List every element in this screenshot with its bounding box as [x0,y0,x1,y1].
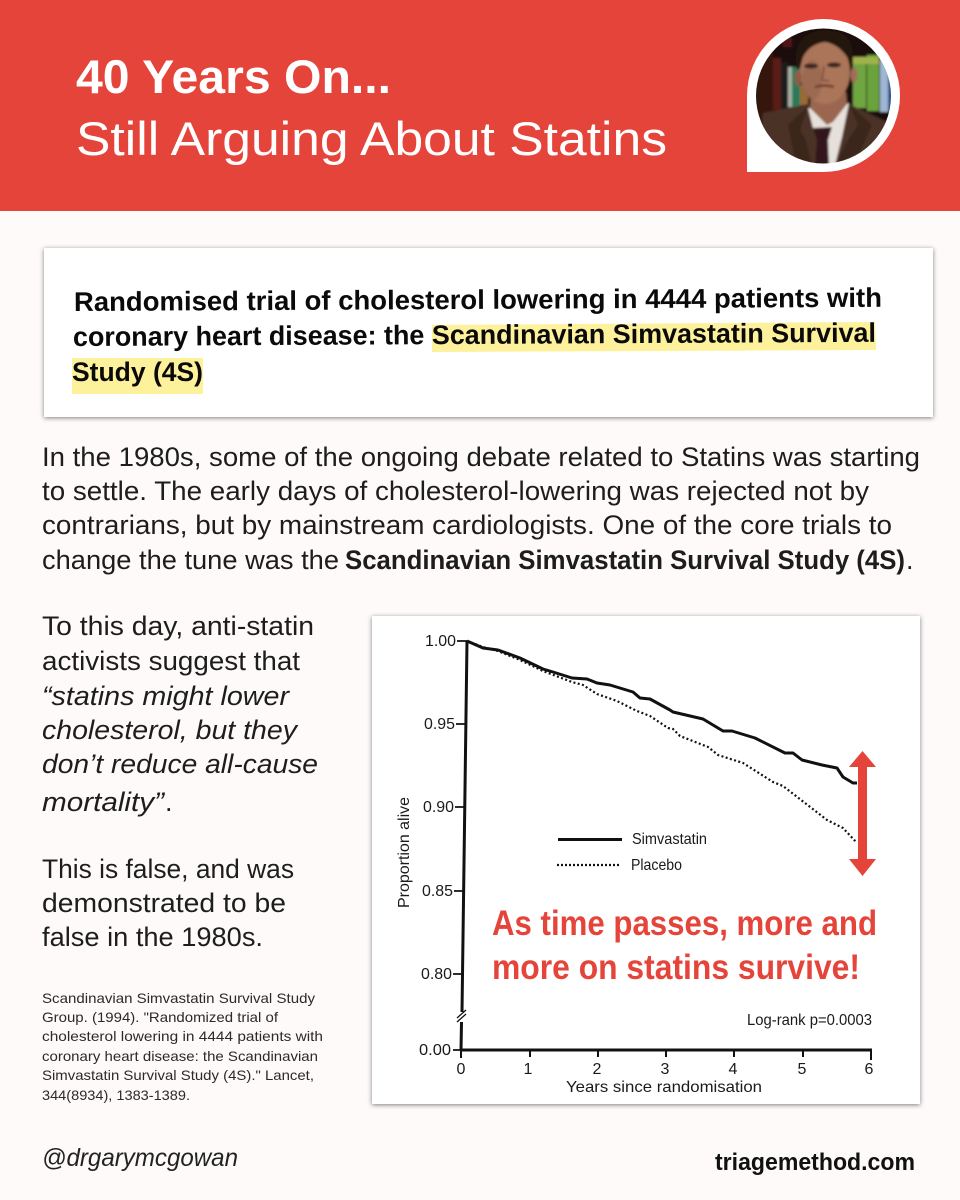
jacket [761,104,886,163]
left column text: rebuttal: false in the 1980s. [42,922,263,952]
simvastatin curve [467,641,857,783]
callout: more on statins survive! [492,948,860,987]
intro paragraph [42,442,920,575]
y tick labels: 0.90 [423,799,454,816]
axis titles [396,797,762,1096]
x tick labels: 0 [457,1061,466,1078]
paper title text: Randomised trial of cholesterol lowering in 4444 patients with [74,283,882,317]
left column text: claim: mortality” [42,787,165,817]
y tick labels: 1.00 [425,633,456,650]
left column text: claim: don’t reduce all-cause [42,749,318,779]
title: 40 Years On... [76,50,391,103]
legend: Placebo [631,857,682,874]
x tick labels [457,1061,874,1078]
legend: Simvastatin [632,831,707,848]
x tick labels: 3 [661,1061,670,1078]
intro paragraph: . [906,545,914,575]
citation: coronary heart disease: the Scandinavian [42,1048,318,1064]
citation: Simvastatin Survival Study (4S)." Lancet, [42,1067,314,1083]
x tick labels: 5 [798,1061,807,1078]
y tick labels: 0.80 [421,966,452,983]
left column text: claim: activists suggest that [42,646,301,676]
panel: paper title card [44,248,933,417]
left column text: claim: “statins might lower [42,681,290,711]
intro paragraph: In the 1980s, some of the ongoing debate related to Statins was starting [42,442,920,472]
paper title text [72,283,882,387]
header banner [0,0,960,211]
left column text: claim: To this day, anti-statin [42,611,314,641]
x tick labels: 4 [729,1061,738,1078]
x tick labels: 2 [593,1061,602,1078]
axis titles: Proportion alive [396,797,413,908]
placebo curve [467,641,857,843]
y tick labels: 0.85 [422,883,453,900]
p value: Log-rank p=0.0003 [747,1012,872,1029]
x tick labels: 6 [865,1061,874,1078]
portrait badge [747,19,900,172]
title: Still Arguing About Statins [76,112,667,165]
x tick labels: 1 [524,1061,533,1078]
intro paragraph: change the tune was the [42,545,339,575]
legend [557,831,707,874]
paper title text: coronary heart disease: the Scandinavian Simvastatin Survival [73,318,876,352]
intro paragraph: to settle. The early days of cholesterol-lowering was rejected not by [42,476,870,506]
website: triagemethod.com [715,1149,915,1176]
axis titles: Years since randomisation [566,1079,762,1096]
left column text: rebuttal [42,854,294,952]
tie [813,127,832,165]
social handle: @drgarymcgowan [42,1144,238,1172]
citation: cholesterol lowering in 4444 patients with [42,1028,323,1044]
eyes and mouth [804,64,818,68]
callout: As time passes, more and [492,904,877,943]
y tick labels: 0.95 [424,716,455,733]
shirt [808,103,849,165]
hair [796,30,853,70]
y tick labels [419,633,456,1059]
left column text: rebuttal: This is false, and was [42,854,294,884]
citation: 344(8934), 1383-1389. [42,1087,190,1103]
citation: Group. (1994). "Randomized trial of [42,1009,278,1025]
callout [492,904,877,987]
paper title text: Study (4S) [72,357,203,387]
left column text: claim [42,611,318,817]
face [800,40,850,104]
left column text: claim: cholesterol, but they [42,715,299,745]
left column text: rebuttal: demonstrated to be [42,888,286,918]
arrow: survival gap [849,751,876,876]
intro paragraph: Scandinavian Simvastatin Survival Study (4S) [345,545,905,575]
panel: survival chart [372,616,920,1104]
intro paragraph: contrarians, but by mainstream cardiologists. One of the core trials to [42,510,892,540]
y tick labels: 0.00 [419,1042,451,1059]
title [76,50,667,165]
neck [810,92,847,125]
highlight: study name [72,322,876,394]
y axis [453,641,467,1050]
left column text: claim: . [165,787,173,817]
x axis [461,1050,872,1060]
citation: Scandinavian Simvastatin Survival Study [42,990,315,1006]
citation [42,990,323,1103]
